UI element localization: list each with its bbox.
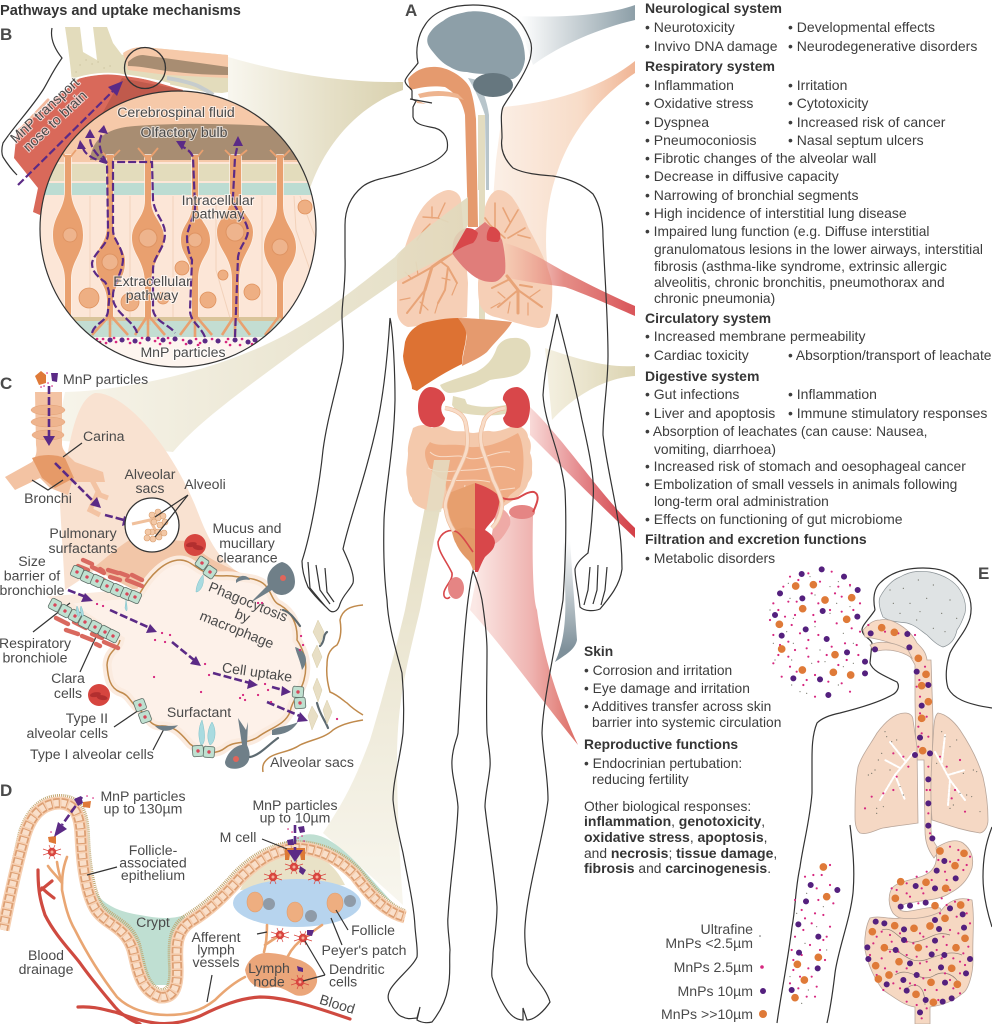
bronchial trees [400, 203, 542, 315]
text: digestive system: Digestive system [645, 368, 759, 384]
arrow: nose to brain [18, 81, 123, 185]
beam: panel C over lung [55, 197, 468, 452]
E body lines [777, 568, 992, 1023]
text: digestive system [645, 368, 987, 527]
text: skin: • Eye damage and irritation [584, 681, 750, 696]
text: respiratory system: • Increased risk of cancer [788, 114, 946, 130]
text: reproductive functions: Reproductive functions [584, 737, 738, 752]
follicles [247, 892, 343, 922]
organ: intestine folds [428, 452, 515, 505]
panel A: body with organs [55, 5, 635, 1023]
label: respiratory bronchiole: Respiratory [0, 635, 71, 651]
text: respiratory system: • Nasal septum ulcers [788, 132, 924, 148]
text: other biological responses: fibrosis and carcinogenesis. [584, 860, 771, 876]
nasal shading [65, 78, 183, 180]
organ: lungs [397, 190, 552, 328]
label: cerebrospinal fluid: Cerebrospinal fluid [117, 104, 235, 120]
bronchiole wall lower [48, 598, 120, 643]
ultrafine particles [770, 577, 980, 1003]
label: blood: Blood [318, 991, 357, 1017]
arrow: to alveoli [105, 515, 134, 526]
arrow: villus [54, 797, 82, 837]
CSF strip [123, 47, 228, 78]
label: mucus: Mucus and [213, 520, 281, 536]
text: circulatory system: Circulatory system [645, 310, 771, 326]
organ: small intestine [425, 433, 524, 533]
beam: neurological [517, 5, 635, 65]
text: respiratory system: granulomatous lesions in the lower airways, interstitial [654, 242, 983, 257]
interstitial cells [308, 620, 332, 730]
label: phagocytosis: Phagocytosis [206, 578, 290, 625]
beam: filtration [530, 407, 635, 538]
text: filtration and excretion: • Metabolic disorders [645, 550, 775, 566]
label: follicle: Follicle [351, 922, 395, 938]
left villus mucus [0, 870, 15, 925]
particle band [97, 338, 260, 345]
label: Alveoli: Alveoli [184, 476, 226, 492]
skull bone [65, 27, 228, 93]
text: neurological system [645, 0, 977, 54]
text: respiratory system: • Narrowing of bronchial segments [645, 187, 858, 203]
label: respiratory bronchiole: bronchiole [2, 650, 68, 666]
neighbouring alveolar sacs [263, 605, 363, 772]
basal cells [79, 200, 312, 311]
text: other biological responses: oxidative stress, apoptosis, [584, 829, 767, 845]
label: particles up to 130: up to 130µm [104, 800, 182, 816]
text: skin: barrier into systemic circulation [592, 715, 781, 730]
label: Alveolar sacs: sacs [136, 480, 164, 496]
organ: cerebellum [473, 73, 513, 97]
lung lobe [60, 393, 243, 593]
organ: brain [427, 11, 525, 79]
text: circulatory system: • Absorption/transport of leachate [788, 348, 992, 363]
organ: liver [403, 318, 512, 391]
label: lymph node: Lymph [248, 960, 290, 976]
beam: reproductive [470, 510, 578, 745]
beam: respiratory [490, 61, 635, 285]
C labels [0, 371, 354, 770]
text: other biological responses: Other biological responses: [584, 799, 751, 814]
label: phagocytosis: by [233, 605, 253, 626]
particles villus [48, 796, 93, 844]
10 micron particles [775, 569, 970, 1012]
text: neurological system: • Invivo DNA damage [645, 38, 778, 54]
label: surfactant: Surfactant [167, 704, 231, 720]
large magnified circle [40, 90, 320, 368]
epithelium [3, 803, 405, 997]
letter E: E [978, 564, 989, 583]
label: Pulmonary surfactants: surfactants [49, 540, 117, 556]
red strips lower [56, 612, 118, 648]
organ: spinal stripes [478, 115, 485, 190]
label: Carina: Carina [83, 428, 125, 444]
organ: brainstem [468, 78, 489, 190]
pointer lines C [32, 443, 188, 750]
neurons [53, 155, 296, 325]
D labels [19, 788, 406, 1017]
panel D: gut pathway [0, 788, 406, 1024]
nasal highlight [18, 100, 48, 132]
text: digestive system: • Immune stimulatory responses [788, 405, 987, 421]
text: respiratory system: • High incidence of interstitial lung disease [645, 205, 907, 221]
text: circulatory system: • Increased membrane permeability [645, 328, 865, 344]
text: filtration and excretion [645, 531, 867, 566]
organ: ureters [445, 408, 505, 531]
label: MnP transport nose to brain: nose to brain [19, 87, 90, 155]
white sinus line [72, 74, 170, 84]
organ: uterus halo [490, 505, 510, 545]
E stomach [889, 841, 973, 920]
letter B: B [0, 25, 12, 44]
text: digestive system: • Embolization of small vessels in animals following [645, 477, 957, 492]
text: neurological system: • Developmental effects [788, 19, 935, 35]
label: Clara cells: Clara [51, 670, 85, 686]
label: extracellular pathway: Extracellular [113, 273, 191, 289]
beige dome [240, 852, 345, 890]
text: digestive system: • Effects on functioning of gut microbiome [645, 511, 903, 527]
text: neurological system: Neurological system [645, 0, 782, 16]
bone speckles [76, 60, 110, 72]
trachea and bronchi [5, 392, 108, 515]
text: respiratory system: chronic pneumonia) [654, 291, 775, 306]
type I cells [155, 576, 306, 735]
label: mucus: mucillary [219, 535, 276, 551]
text: other biological responses [584, 799, 777, 876]
intracellular pathways [176, 136, 248, 337]
label: crypt: Crypt [136, 914, 170, 930]
letter D: D [0, 781, 12, 800]
label: Peyer's: Peyer's patch [322, 942, 406, 958]
alveolar type II cells [133, 555, 306, 758]
label: MnP particles: MnP particles [63, 371, 148, 387]
label: size barrier: Size [18, 553, 46, 569]
spinal stripe between lungs [479, 190, 485, 320]
arrow: down trachea [43, 386, 55, 446]
text: respiratory system: • Irritation [788, 77, 847, 93]
organ: kidneys [418, 387, 530, 428]
organ: rectum and bladder [446, 483, 475, 570]
panel B: nose to brain [2, 27, 320, 368]
legend: 2.5: MnPs 2.5µm [674, 959, 753, 975]
text: digestive system: long-term oral administration [654, 494, 829, 509]
connector beams [228, 5, 635, 905]
particle arrows through alveolus [68, 590, 308, 722]
text: respiratory system: • Dyspnea [645, 114, 709, 130]
label: FAE: epithelium [121, 867, 185, 883]
label: type II: alveolar cells [27, 725, 108, 741]
organ: stomach [440, 338, 530, 393]
scattered pink particles [97, 603, 337, 719]
grey meninges [167, 78, 213, 95]
mucus blue cilia [76, 575, 215, 745]
organ: pancreas [452, 396, 515, 415]
2.5 micron particles [770, 572, 970, 1018]
macrophage top [250, 562, 295, 603]
extracellular pathway [77, 125, 175, 333]
particles above trachea [35, 371, 58, 387]
cerebrospinal fluid layer [58, 92, 298, 162]
crypt mucus [92, 885, 185, 985]
text: neurological system: • Neurodegenerative disorders [788, 38, 977, 54]
beam: panel B [228, 57, 403, 260]
label: intracellular pathway: Intracellular [182, 192, 254, 208]
label: MnP transport nose to brain: MnP transport [7, 74, 82, 146]
macrophage bottom [225, 718, 250, 769]
legend: ultrafine [665, 921, 761, 951]
Peyer's patch [233, 879, 361, 927]
text: respiratory system: • Decrease in diffusive capacity [645, 168, 839, 184]
neuron nuclei [63, 223, 288, 270]
panel C: lung pathway [0, 371, 363, 772]
text: neurological system: • Neurotoxicity [645, 19, 735, 35]
text: respiratory system: fibrosis (asthma-like syndrome, extrinsic allergic [654, 259, 947, 274]
beam: panel D [323, 460, 450, 905]
text: respiratory system [645, 58, 983, 306]
text: reproductive functions [584, 737, 742, 787]
legend [661, 921, 767, 1022]
panel E: exposure body [770, 568, 992, 1024]
E mouth passage [870, 642, 912, 658]
text: reproductive functions: • Endocrinian pertubation: [584, 756, 742, 771]
legend: ultrafine: Ultrafine [701, 921, 753, 937]
E intestines [865, 899, 973, 1024]
organ: prostate [453, 528, 475, 566]
label: dendritic: Dendritic [329, 961, 385, 977]
beam: heart to circulatory [505, 243, 635, 316]
text: skin [584, 644, 781, 730]
pointer lines D [87, 839, 348, 1002]
E intestine folds [882, 929, 962, 1005]
grey follicle cells [263, 895, 356, 922]
organ: heart [452, 222, 505, 282]
label: FAE: associated [119, 854, 187, 870]
text: digestive system: • Absorption of leachates (can cause: Nausea, [645, 424, 927, 439]
legend: 10: MnPs 10µm [678, 983, 753, 999]
label: cell uptake: Cell uptake [221, 659, 293, 685]
title: Pathways and uptake mechanisms [0, 3, 241, 19]
dendritic cells [43, 845, 326, 989]
body outline [302, 5, 622, 1023]
arrow: dome [287, 825, 303, 862]
small magnifier circle [124, 48, 166, 88]
label: lymph node: node [253, 974, 285, 990]
cribriform bone [40, 164, 316, 181]
text: skin: Skin [584, 644, 613, 659]
particles scatter [770, 569, 980, 1018]
text: respiratory system: • Fibrotic changes of the alveolar wall [645, 150, 876, 166]
E brain [879, 571, 965, 647]
label: MnP particles B: MnP particles [140, 344, 226, 360]
label: extracellular pathway: pathway [126, 287, 179, 303]
letter A: A [405, 1, 417, 20]
text: other biological responses: inflammation, genotoxicity, [584, 813, 765, 829]
M cell [285, 848, 305, 860]
label: afferent: lymph [197, 942, 235, 958]
label: blood drainage: Blood [28, 947, 64, 963]
label: particles up to 10: MnP particles [252, 797, 338, 813]
dome mucus [215, 834, 395, 905]
label: blood drainage: drainage [19, 961, 74, 977]
label: afferent: vessels [192, 954, 240, 970]
text: filtration and excretion: Filtration and excretion functions [645, 531, 867, 547]
letter C: C [0, 374, 12, 393]
olfactory dendrites [60, 148, 290, 160]
label: type II: Type II [66, 710, 108, 726]
beam: digestive [545, 348, 635, 420]
label: Alveolar sacs: Alveolar [125, 466, 175, 482]
E lungs [855, 713, 988, 833]
text: digestive system: • Liver and apoptosis [645, 405, 775, 421]
large particles [779, 585, 965, 1002]
label: Bronchi: Bronchi [24, 490, 72, 506]
blood vessels [38, 870, 350, 1024]
arrow: to bronchi [55, 463, 101, 508]
organ: fallopian tube and ovary [500, 492, 538, 519]
label: particles up to 130: MnP particles [100, 788, 186, 804]
olfactory bulb [90, 124, 320, 160]
organ: large intestine [406, 425, 532, 511]
olfactory strip [128, 55, 228, 75]
lymph vessels [48, 857, 322, 1015]
organ: oral cavity [416, 91, 464, 104]
text: digestive system: vomiting, diarrhoea) [654, 442, 776, 457]
text: respiratory system: • Cytotoxicity [788, 95, 868, 111]
label: M cell: M cell [220, 829, 256, 845]
text: skin: • Corrosion and irritation [584, 663, 732, 678]
label: particles up to 10: up to 10µm [260, 810, 330, 826]
supporting cell lines [90, 196, 320, 318]
alveolar sac outline [107, 560, 306, 752]
text: respiratory system: • Oxidative stress [645, 95, 753, 111]
alveolar sac glow [60, 560, 306, 752]
profile line [2, 28, 62, 175]
label: intracellular pathway: pathway [192, 206, 245, 222]
label: alveolar sacs: Alveolar sacs [270, 754, 354, 770]
teal layer [40, 183, 316, 195]
legend: ultrafine: MnPs <2.5µm [665, 935, 753, 951]
label: size barrier: bronchiole [0, 582, 65, 598]
E airway and esophagus [863, 619, 940, 858]
macrophage strands [250, 610, 328, 757]
label: olfactory bulb: Olfactory bulb [141, 124, 228, 140]
text: other biological responses: and necrosis; tissue damage, [584, 845, 777, 861]
E lung branches [880, 735, 965, 805]
legend: >>10: MnPs >>10µm [661, 1006, 753, 1022]
fringe [0, 796, 405, 990]
label: Pulmonary surfactants: Pulmonary [49, 525, 117, 541]
text: circulatory system [645, 310, 992, 363]
text: skin: • Additives transfer across skin [584, 699, 771, 714]
pale lumen [94, 337, 262, 366]
bronchiole wall upper [70, 565, 142, 604]
label: afferent: Afferent [191, 929, 241, 945]
text: digestive system: • Increased risk of stomach and oesophageal cancer [645, 459, 966, 474]
label: type I: Type I alveolar cells [30, 746, 154, 762]
large circle border [40, 91, 316, 367]
text: respiratory system: Respiratory system [645, 58, 775, 74]
text: respiratory system: • Impaired lung function (e.g. Diffuse interstitial [645, 224, 930, 239]
text: digestive system: • Inflammation [788, 386, 877, 402]
tan ciliated line [72, 317, 284, 321]
text: circulatory system: • Cardiac toxicity [645, 347, 749, 363]
label: mucus: clearance [216, 550, 278, 566]
text: respiratory system: • Pneumoconiosis [645, 132, 757, 148]
text: reproductive functions: reducing fertility [592, 772, 689, 787]
lymph node [245, 953, 317, 996]
organ: testis [438, 530, 473, 599]
organ: uterus half [475, 483, 500, 572]
neuron roots [91, 316, 284, 337]
label: phagocytosis [195, 578, 290, 653]
text: respiratory system: • Inflammation [645, 77, 734, 93]
label: size barrier: barrier of [4, 568, 60, 584]
label: Clara cells: cells [54, 685, 82, 701]
nasal mucosa [14, 74, 183, 215]
label: FAE: Follicle- [129, 842, 177, 858]
beam: skin [555, 540, 577, 662]
mucus teal layer [76, 321, 280, 337]
darker tissue [93, 533, 248, 593]
label: dendritic: cells [329, 974, 357, 990]
label: phagocytosis: macrophage [198, 607, 276, 652]
beam: over intestine [426, 460, 450, 512]
organ: nasal passage and trachea [408, 67, 478, 227]
alveoli inset [125, 498, 179, 552]
red blood cells [88, 534, 206, 706]
text: respiratory system: alveolitis, chronic bronchitis, pneumothorax and [654, 275, 945, 290]
text: digestive system: • Gut infections [645, 386, 739, 402]
red strips upper [78, 560, 142, 586]
particles dome [287, 826, 314, 972]
